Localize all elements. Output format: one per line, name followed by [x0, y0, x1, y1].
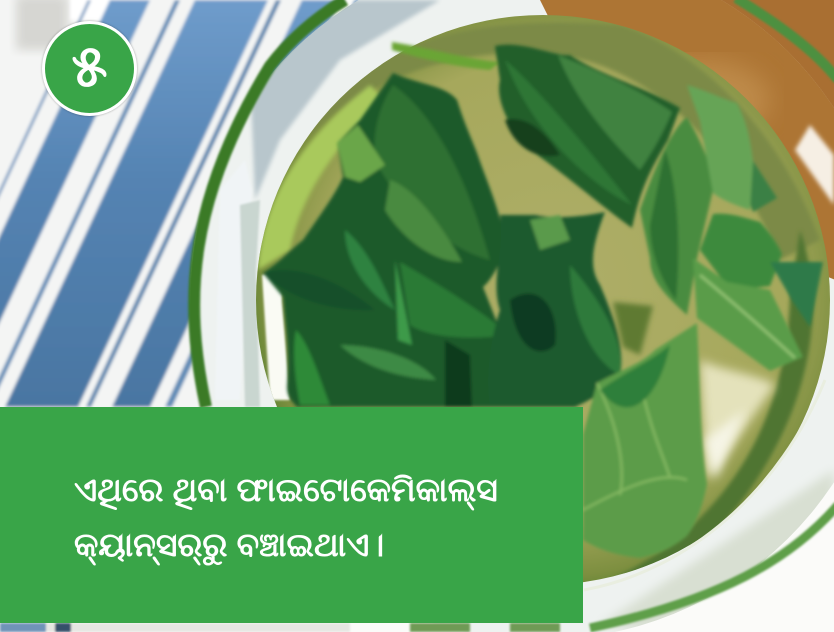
top dark leaf [495, 45, 680, 228]
blue band far left [0, 0, 150, 407]
glass bowl [190, 0, 834, 632]
thin line beside main band [86, 0, 281, 407]
bottom edge strip [0, 623, 560, 632]
shadow of leaf [613, 302, 653, 355]
outer green rim [194, 0, 834, 628]
badge: number five: ୫ [71, 34, 108, 99]
dish [256, 15, 830, 585]
badge: number five [42, 21, 137, 116]
panel: green caption box [0, 407, 583, 623]
caption text [74, 471, 498, 566]
dish wall left highlight [258, 85, 385, 270]
stem [392, 42, 500, 70]
dish wall top [300, 22, 820, 260]
thin line lower right [165, 0, 362, 407]
wooden table [540, 0, 834, 300]
dish wall right [616, 232, 815, 576]
cream reflection [700, 360, 775, 480]
mid leaf [488, 212, 621, 407]
mint leaves [263, 42, 823, 558]
towel [0, 0, 362, 415]
main blue band [5, 0, 268, 407]
second blue band [112, 0, 340, 407]
left cluster [263, 73, 520, 407]
caption text: କ୍ୟାନ୍ସର୍‌ରୁ ବଞ୍ଚାଇଥାଏ। [74, 526, 384, 563]
lower right glass edge [584, 380, 825, 590]
thin lines [0, 0, 91, 407]
caption text: ଏଥିରେ ଥିବା ଫାଇଟୋକେମିକାଲ୍ସ [74, 471, 498, 508]
big bottom leaf [583, 323, 707, 558]
right leaves [745, 161, 777, 212]
outer glass [190, 0, 834, 632]
